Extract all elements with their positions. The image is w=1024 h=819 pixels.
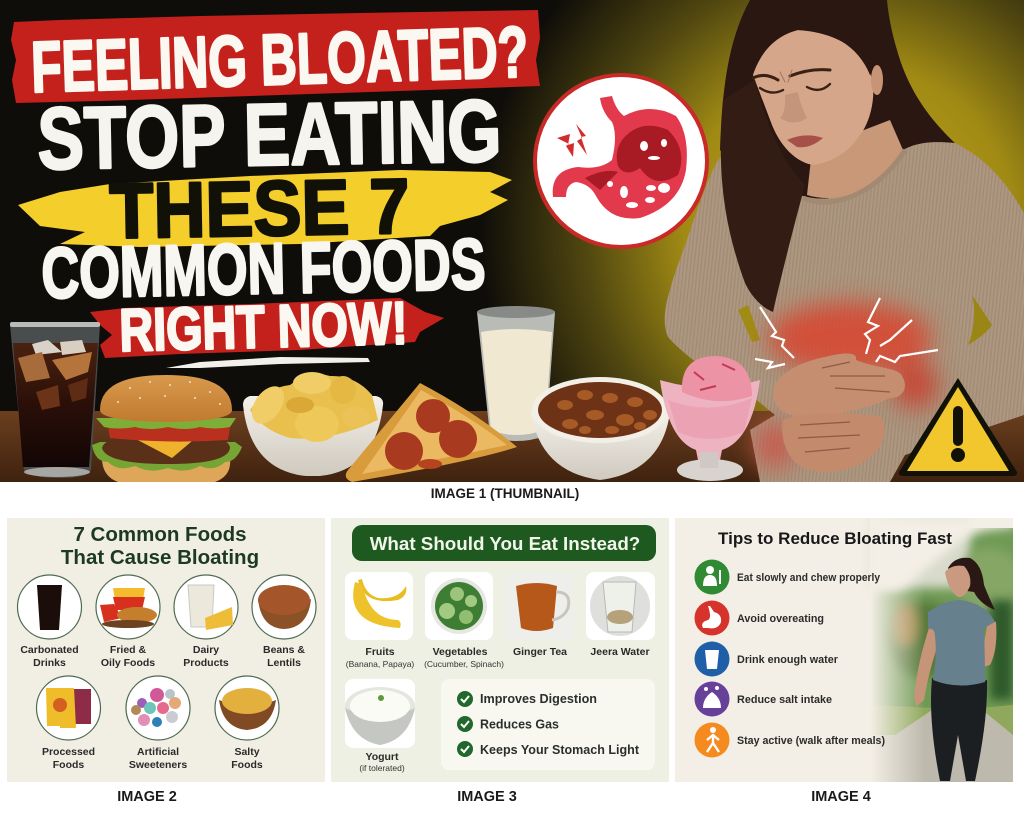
eyes and brows [753,70,830,93]
panel background [331,518,669,782]
food: ginger tea [505,572,574,658]
food: artificial sweeteners [126,676,190,771]
headline: right now on red brush [90,298,444,358]
walker: hair [948,558,995,610]
walker: shirt [928,600,995,686]
stomach red glow [753,302,939,469]
hair back [720,0,957,210]
headline: right now on red brush: RIGHT NOW! [119,289,408,364]
food: fruits: (Banana, Papaya) [346,659,414,669]
icon: burger [92,375,242,482]
food: dairy products: Dairy [193,644,219,656]
food: ginger tea: Ginger Tea [513,646,567,658]
headline: stop eating: STOP EATING [37,81,502,188]
hair falling on shoulder [721,80,805,312]
fade to panel [870,518,925,782]
food: dairy products: Products [183,657,229,669]
upper hand [773,354,905,416]
food: fried and oily foods: Oily Foods [101,657,155,669]
headline: these 7 on yellow brush: THESE 7 [109,162,410,255]
tip: reduce salt [694,682,832,716]
hair front [753,30,870,75]
caption: image 3: IMAGE 3 [457,789,517,805]
walker: face [945,566,970,597]
icon: milk glass [477,306,555,441]
icon: bloated stomach badge [535,75,707,247]
sweater collar [803,150,905,202]
nose [780,92,807,122]
face [753,30,873,165]
lower hand [782,413,885,472]
icon: beans bowl [531,377,670,480]
tip: drink water [694,642,839,676]
photo: park walker [873,528,1013,782]
food: jeera water [586,572,655,658]
food: processed foods: Processed [42,746,95,758]
food: carbonated drinks: Carbonated [20,644,79,656]
neck [807,120,903,198]
food: salty foods [215,676,279,771]
food: vegetables [424,572,504,669]
headline: feeling bloated [11,10,540,108]
food: vegetables: Vegetables [433,646,488,658]
panel: what to eat instead [331,518,669,782]
benefits box [441,679,655,770]
food: dairy products [174,575,238,669]
food: beans and lentils: Lentils [267,657,301,669]
food: artificial sweeteners: Sweeteners [129,759,187,771]
food: salty foods: Salty [234,746,260,758]
headline: these 7 on yellow brush [18,170,512,247]
yellow gaps beside torso [968,295,992,345]
tip: reduce salt: Reduce salt intake [737,694,832,706]
icon: chips bowl [243,372,383,476]
panel background [7,518,325,782]
food: carbonated drinks [18,575,82,669]
panel heading: 7 Common Foods [73,523,247,546]
headline: feeling bloated: FEELING BLOATED? [30,12,529,108]
headline: common foods: COMMON FOODS [41,225,486,314]
food: processed foods [36,676,100,771]
panel: 7 common foods [7,518,325,782]
icon: warning triangle [899,378,1017,476]
caption: image 1: IMAGE 1 (THUMBNAIL) [431,486,579,501]
ear [871,65,883,95]
tip: eat slowly: Eat slowly and chew properly [737,572,881,584]
food: beans and lentils: Beans & [263,644,305,656]
panel heading: That Cause Bloating [61,546,259,569]
food: processed foods: Foods [53,759,84,771]
food: artificial sweeteners: Artificial [137,746,179,758]
tip: stay active [694,722,885,758]
food: beans and lentils [252,575,316,669]
tip: drink water: Drink enough water [737,654,839,666]
food: yogurt [345,679,415,773]
food: vegetables: (Cucumber, Spinach) [424,659,504,669]
food: fried and oily foods [96,575,160,669]
panel heading [61,523,259,569]
illustration: woman in pain [665,0,1024,482]
food: jeera water: Jeera Water [590,646,650,658]
benefit: keeps stomach light: Keeps Your Stomach Light [480,743,640,757]
panel heading: Tips to Reduce Bloating Fast [718,529,952,548]
walker: legs [931,678,987,781]
cream top fade [870,518,1013,590]
food: fruits [345,572,414,669]
tip: eat slowly [694,560,881,594]
sweater rib texture [665,142,1024,482]
food: yogurt: (if tolerated) [359,763,405,773]
icon: strawberry ice cream [660,356,760,481]
benefit: improves digestion: Improves Digestion [480,692,597,706]
wooden table [0,411,1024,482]
food: fruits: Fruits [365,646,395,658]
food: salty foods: Foods [231,759,263,771]
panel heading pill: What Should You Eat Instead? [370,533,640,554]
park backdrop [873,528,1013,708]
tip: avoid overeating: Avoid overeating [737,613,824,625]
mouth [787,135,823,147]
caption: image 2: IMAGE 2 [117,789,177,805]
walker: arms [914,620,996,707]
panel: tips to reduce bloating [675,518,1022,782]
caption: image 4: IMAGE 4 [811,789,871,805]
panel heading pill [352,525,656,561]
benefit: reduces gas [457,716,559,732]
food: carbonated drinks: Drinks [33,657,66,669]
food: fried and oily foods: Fried & [110,644,147,656]
tip: stay active: Stay active (walk after meals) [737,735,885,747]
icon: pizza slice [346,383,517,482]
dark yellow glow background [0,0,1024,411]
white brush underline [166,357,370,368]
lightning bolts [755,298,938,368]
panel background [675,518,1013,782]
food: yogurt: Yogurt [365,751,399,763]
sweater [665,142,1024,482]
panel: thumbnail hero [0,0,1024,482]
tip: avoid overeating [694,600,824,636]
icon: cola glass [10,322,100,478]
benefit: reduces gas: Reduces Gas [480,718,559,732]
